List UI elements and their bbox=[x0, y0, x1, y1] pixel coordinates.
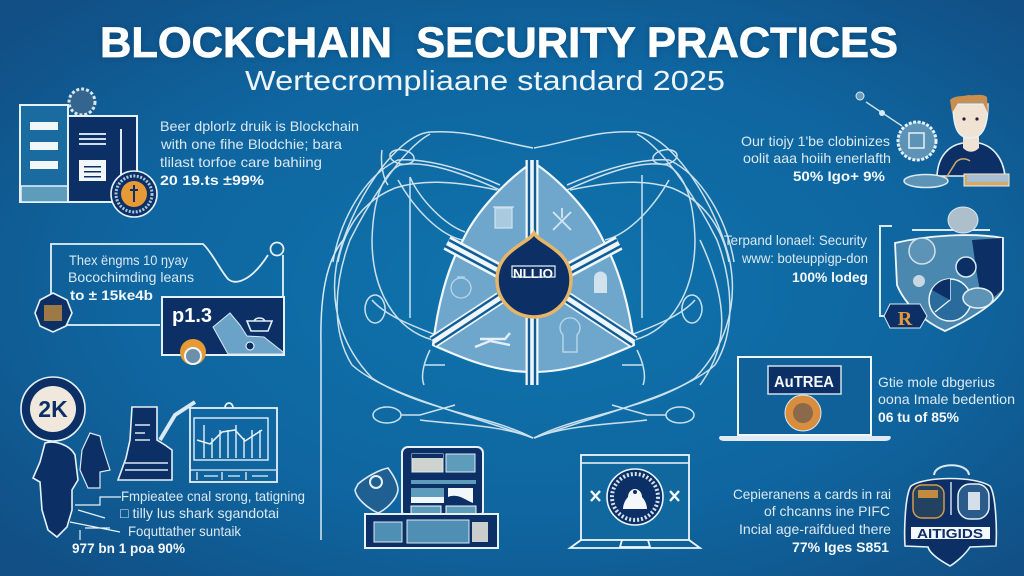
panel: bottom-right badge bbox=[905, 465, 996, 566]
icon: crosses bbox=[591, 491, 679, 501]
panel: mid-left chart card bbox=[35, 242, 284, 365]
panel: top-right person bbox=[856, 92, 1009, 188]
text: mid-left: to ± 15ke4b bbox=[70, 287, 153, 303]
stair lines bbox=[70, 497, 121, 540]
icon: gear bbox=[69, 89, 95, 115]
central shield bbox=[431, 160, 636, 385]
book bbox=[964, 174, 1009, 186]
2K circle bbox=[21, 377, 85, 441]
long vertical line bbox=[321, 238, 345, 540]
monitor chart bbox=[190, 403, 277, 482]
panel: mid-right shield bbox=[880, 207, 1003, 331]
title: BLOCKCHAIN SECURITY PRACTICES bbox=[100, 19, 898, 67]
document sidebar bbox=[20, 105, 68, 202]
text: bottom-left: Foquttather suntaik bbox=[128, 523, 242, 539]
text: mid-right bbox=[724, 232, 868, 285]
text: bottom-right bbox=[733, 486, 891, 555]
icon: second person bbox=[80, 433, 110, 488]
text: bottom-right: 77% Iges S851 bbox=[792, 539, 889, 555]
lock seal bbox=[607, 469, 663, 525]
text: bottom-left: Fmpieatee cnal srong, tatigning bbox=[121, 488, 305, 504]
centre badge bbox=[497, 233, 571, 317]
icon: machine bbox=[475, 333, 510, 347]
text: top-right: oolit aaa hoiih enerlafth bbox=[743, 150, 891, 166]
left curves bbox=[333, 132, 533, 438]
text: right laptop: 06 tu of 85% bbox=[878, 409, 960, 425]
icon: tower right bbox=[594, 272, 607, 293]
shield body bbox=[433, 162, 634, 372]
panel: mid-left chart card: p1.3 bbox=[172, 305, 212, 327]
text: bottom-left: □ tilly lus shark sgandotai bbox=[120, 505, 279, 521]
label: AITIGIDS: AITIGIDS bbox=[917, 527, 983, 541]
navy inset bbox=[162, 297, 284, 355]
text: bottom-left: 977 bn 1 poa 90% bbox=[72, 540, 186, 556]
text: top-left bbox=[160, 118, 359, 188]
disc bbox=[904, 174, 948, 188]
panel: mid-right shield: R bbox=[898, 308, 913, 330]
text: top-left: with one fihe Blodchie; bara bbox=[160, 136, 342, 152]
connector bbox=[866, 102, 902, 126]
icon: crossed tools bbox=[553, 208, 571, 230]
text: mid-right: www: boteuppigp-don bbox=[741, 250, 868, 266]
pie bbox=[929, 279, 971, 321]
seal bbox=[898, 122, 936, 160]
orange coin bbox=[785, 395, 821, 431]
icon: person bbox=[937, 143, 1005, 176]
panel: bottom-left analyst bbox=[21, 377, 277, 540]
text: mid-left: Thex ëngms 10 ŋyay bbox=[69, 252, 188, 268]
panel: bottom-centre device bbox=[355, 447, 498, 548]
right curves bbox=[534, 132, 734, 438]
icon: small shield bbox=[355, 468, 398, 513]
text: bottom-left bbox=[72, 488, 305, 556]
icon: brain seal bbox=[948, 207, 978, 233]
icon: lock left bbox=[451, 277, 471, 298]
emblem left bbox=[913, 485, 944, 518]
base tray bbox=[365, 514, 498, 548]
octagon badge bbox=[35, 293, 72, 332]
text: mid-left bbox=[68, 252, 194, 303]
2K circle: 2K bbox=[38, 396, 68, 422]
icon: sun gear bbox=[180, 339, 206, 365]
subtitle: Wertecrompliaane standard 2025 bbox=[245, 65, 725, 96]
text: top-left: Beer dplorlz druik is Blockchain bbox=[160, 118, 359, 134]
text: bottom-right: of chcanns ine PIFC bbox=[764, 503, 890, 519]
icon: orange badge bbox=[111, 171, 157, 217]
label: AUTREA bbox=[768, 366, 841, 394]
text: right laptop: oona Imale bedention bbox=[878, 391, 1015, 407]
central network diagram bbox=[321, 132, 734, 540]
R badge bbox=[884, 304, 927, 328]
text: right laptop bbox=[878, 374, 1015, 425]
text: mid-right: Terpand lonael: Security bbox=[724, 232, 867, 248]
text: bottom-right: Cepieranens a cards in rai bbox=[733, 486, 891, 502]
text: mid-left: Bocochimding leans bbox=[68, 269, 194, 285]
badge glyph: NLLIO bbox=[513, 266, 553, 281]
emblem right bbox=[958, 484, 989, 519]
text: top-right bbox=[741, 133, 891, 184]
text: right laptop: Gtie mole dbgerius bbox=[878, 374, 995, 390]
machine bbox=[118, 402, 195, 480]
text: top-left: tlilast torfoe care bahiing bbox=[160, 154, 322, 170]
icon: tablet bbox=[493, 207, 514, 228]
panel: top-left document bbox=[20, 89, 157, 217]
card outline bbox=[51, 244, 283, 325]
panel: right laptop bbox=[719, 357, 891, 441]
document main bbox=[68, 116, 137, 202]
label: AUTREA: AuTREA bbox=[774, 374, 834, 391]
title: BLOCKCHAIN SECURITY PRACTICES bbox=[100, 19, 898, 67]
text: top-right: 50% Igo+ 9% bbox=[793, 168, 886, 184]
icon: pin bbox=[270, 242, 284, 256]
icon: person bbox=[33, 442, 78, 537]
shield bands bbox=[431, 160, 636, 385]
text: bottom-right: Incial age-raifdued there bbox=[739, 521, 891, 537]
icon: bulb bbox=[560, 318, 580, 352]
text: top-right: Our tiojy 1'be clobinizes bbox=[741, 133, 890, 149]
panel: bottom-centre laptop bbox=[570, 455, 700, 548]
text: top-left: 20 19.ts ±99% bbox=[160, 172, 265, 188]
text: mid-right: 100% lodeg bbox=[792, 269, 868, 285]
tablet bbox=[402, 447, 483, 517]
